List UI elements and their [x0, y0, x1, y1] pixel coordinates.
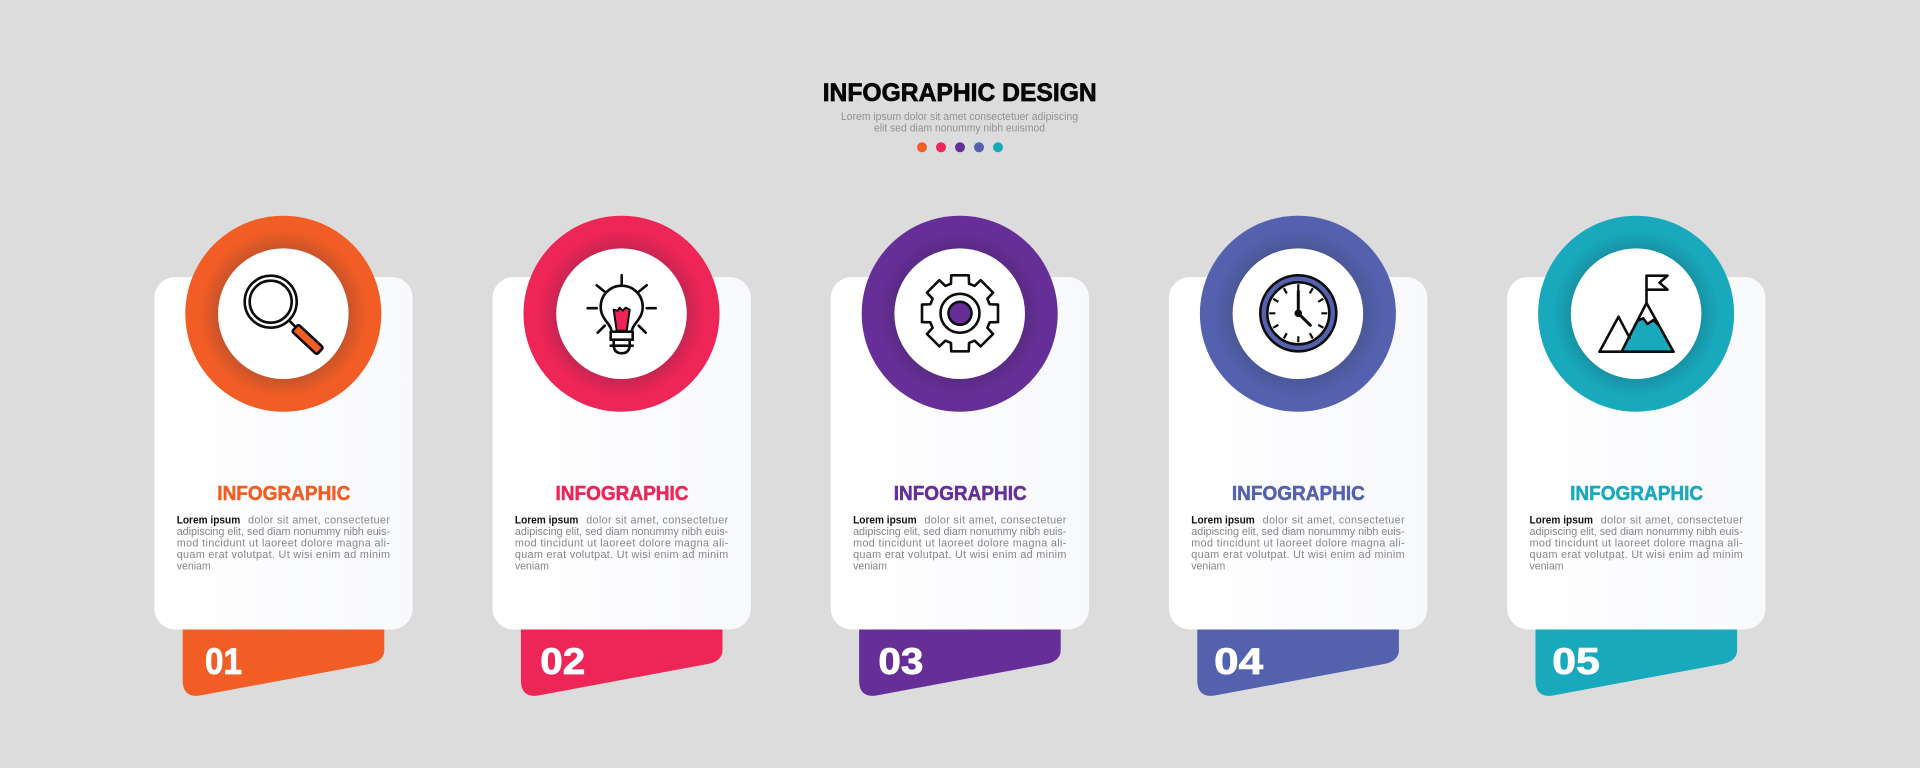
number tab: [183, 620, 384, 696]
body text: [1191, 514, 1405, 572]
body text: Lorem ipsum: [1191, 514, 1255, 526]
heading: INFOGRAPHIC: [217, 482, 350, 505]
body text: Lorem ipsum: [177, 514, 240, 526]
panel: step 03: [831, 216, 1089, 696]
number: 03: [878, 641, 923, 682]
icon: mountain with flag: [1600, 276, 1674, 352]
card: [154, 277, 413, 630]
body text: adipiscing elit, sed diam nonummy nibh euis-: [1191, 526, 1405, 538]
icon: clock: [1260, 275, 1336, 351]
subtitle: [841, 111, 1078, 135]
icon: magnifier: [245, 276, 323, 355]
heading: INFOGRAPHIC: [556, 482, 689, 505]
body text: veniam: [1530, 560, 1564, 572]
body text: Lorem ipsum: [853, 514, 917, 526]
inner circle: [556, 248, 687, 379]
body text: quam erat volutpat. Ut wisi enim ad minim: [177, 549, 390, 561]
inner circle: [1571, 248, 1701, 379]
card: [492, 277, 751, 630]
subtitle: elit sed diam nonummy nibh euismod: [874, 123, 1045, 135]
body text: Lorem ipsum: [515, 514, 578, 526]
body text: veniam: [853, 560, 887, 572]
panel: step 04: [1169, 216, 1427, 696]
body text: mod tincidunt ut laoreet dolore magna ali-: [177, 537, 390, 549]
heading: INFOGRAPHIC: [1232, 482, 1365, 505]
icon: gear: [922, 275, 998, 351]
body text: dolor sit amet, consectetuer: [586, 514, 729, 526]
body text: quam erat volutpat. Ut wisi enim ad minim: [853, 549, 1066, 561]
body text: adipiscing elit, sed diam nonummy nibh euis-: [515, 526, 729, 538]
number tab: [1536, 620, 1737, 696]
body text: veniam: [1191, 560, 1225, 572]
ring: [1200, 216, 1396, 412]
body text: [853, 514, 1067, 572]
number: 04: [1214, 641, 1264, 682]
colour dots: [917, 142, 1003, 152]
icon: light bulb: [588, 275, 656, 353]
ring: [1538, 216, 1734, 412]
number: 01: [205, 641, 242, 682]
body text: [515, 514, 729, 572]
body text: veniam: [515, 560, 549, 572]
body text: quam erat volutpat. Ut wisi enim ad minim: [515, 549, 728, 561]
body text: mod tincidunt ut laoreet dolore magna ali-: [853, 537, 1067, 549]
body text: dolor sit amet, consectetuer: [1601, 514, 1743, 526]
body text: veniam: [177, 560, 211, 572]
body text: mod tincidunt ut laoreet dolore magna ali-: [515, 537, 729, 549]
title: INFOGRAPHIC DESIGN: [823, 79, 1097, 107]
body text: Lorem ipsum: [1530, 514, 1593, 526]
body text: dolor sit amet, consectetuer: [924, 514, 1067, 526]
subtitle: Lorem ipsum dolor sit amet consectetuer adipiscing: [841, 111, 1078, 123]
number tab: [521, 620, 722, 696]
number: 05: [1552, 641, 1600, 682]
ring: [524, 216, 720, 412]
heading: INFOGRAPHIC: [1570, 482, 1703, 505]
inner circle: [894, 248, 1025, 379]
header: [823, 79, 1097, 152]
inner circle: [218, 248, 349, 379]
card: [1507, 277, 1766, 630]
body text: adipiscing elit, sed diam nonummy nibh euis-: [1530, 526, 1743, 538]
body text: adipiscing elit, sed diam nonummy nibh euis-: [177, 526, 390, 538]
body text: [1530, 514, 1743, 572]
heading: INFOGRAPHIC: [894, 482, 1027, 505]
panel: step 01: [154, 216, 413, 696]
number tab: [859, 620, 1061, 696]
ring: [185, 216, 381, 412]
number: 02: [540, 641, 585, 682]
card: [1169, 277, 1427, 630]
ring: [862, 216, 1058, 412]
panel: step 05: [1507, 216, 1766, 696]
number tab: [1197, 620, 1399, 696]
inner circle: [1233, 248, 1363, 379]
body text: quam erat volutpat. Ut wisi enim ad minim: [1191, 549, 1405, 561]
body text: mod tincidunt ut laoreet dolore magna ali-: [1530, 537, 1743, 549]
body text: mod tincidunt ut laoreet dolore magna ali-: [1191, 537, 1405, 549]
body text: quam erat volutpat. Ut wisi enim ad minim: [1530, 549, 1743, 561]
body text: adipiscing elit, sed diam nonummy nibh euis-: [853, 526, 1067, 538]
body text: dolor sit amet, consectetuer: [1263, 514, 1405, 526]
panel: step 02: [492, 216, 751, 696]
card: [831, 277, 1089, 630]
body text: [177, 514, 390, 572]
body text: dolor sit amet, consectetuer: [248, 514, 390, 526]
